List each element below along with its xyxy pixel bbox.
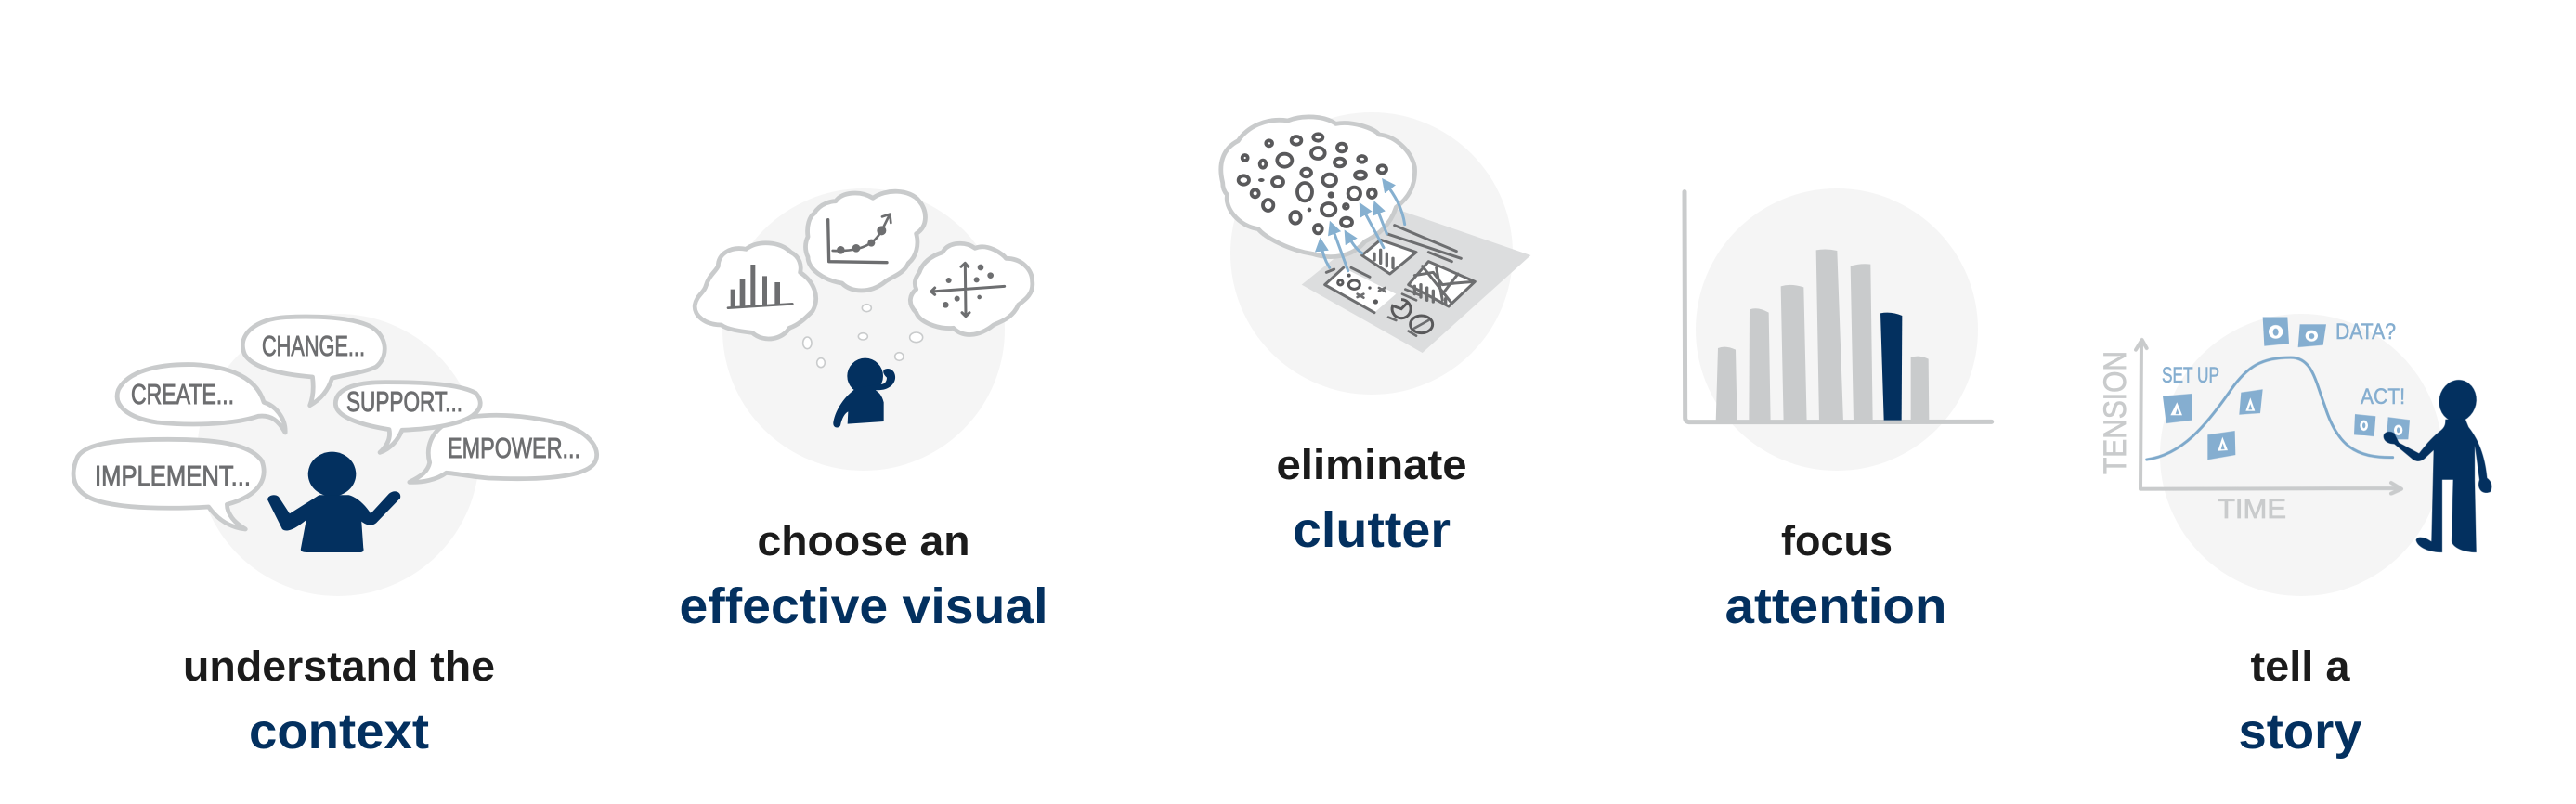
label: choose an effective visual [680, 517, 1047, 634]
label: focus attention: focus [1781, 517, 1893, 564]
panel: understand the context [73, 314, 597, 759]
label: focus attention [1725, 517, 1946, 634]
cloud: scatter plot [910, 243, 1033, 334]
cloud: bar chart [695, 243, 816, 339]
label: tell a story: story [2238, 704, 2362, 759]
background circle [1230, 112, 1513, 395]
gray bars [1716, 249, 1929, 424]
background circle [197, 314, 479, 596]
highlighted navy bar [1880, 313, 1902, 421]
illustration: clutter cloud above dashboard [1221, 117, 1530, 353]
label: eliminate clutter [1276, 441, 1467, 558]
arrows from dashboard to cloud [1321, 183, 1405, 271]
label: understand the context: context [249, 704, 429, 759]
speech bubbles [73, 317, 597, 529]
icon: presenting person [2384, 376, 2491, 552]
tension curve [2147, 357, 2393, 460]
text: set up: SET UP [2162, 363, 2219, 388]
label: understand the context [183, 642, 495, 759]
panel: eliminate clutter [1221, 112, 1530, 558]
axes [2136, 340, 2401, 494]
cluttered circles [1239, 134, 1386, 233]
bubble text: implement: IMPLEMENT... [95, 460, 251, 492]
panel: choose an effective visual [680, 188, 1047, 634]
label: eliminate clutter: clutter [1293, 502, 1451, 558]
label: eliminate clutter: eliminate [1276, 441, 1467, 488]
label: focus attention: attention [1725, 578, 1946, 634]
text: tension axis label: TENSION [2098, 351, 2133, 474]
background circle [2160, 314, 2442, 596]
icon: person shrugging [267, 452, 400, 552]
label: choose an effective visual: effective visual [680, 578, 1047, 634]
bubble text: change: CHANGE... [262, 330, 365, 362]
icon: thinking person [833, 358, 895, 428]
bubble text: support: SUPPORT... [346, 385, 462, 418]
panel: focus attention [1685, 188, 1992, 634]
filled dots [1258, 178, 1334, 212]
background circle [722, 188, 1005, 471]
text: act!: ACT! [2361, 384, 2405, 409]
panel: tell a story [2098, 314, 2491, 759]
bar chart [1685, 192, 1992, 424]
cloud: line chart [805, 191, 925, 291]
bubble text: empower: EMPOWER... [448, 432, 580, 464]
axes [1685, 192, 1992, 422]
label: tell a story: tell a [2251, 642, 2351, 690]
dashboard paper [1302, 209, 1530, 353]
label: understand the context: understand the [183, 642, 495, 690]
cloud [1221, 117, 1415, 257]
background circle [1696, 188, 1978, 471]
thought clouds and person [695, 191, 1033, 428]
label: choose an effective visual: choose an [758, 517, 969, 564]
bubble text: create: CREATE... [131, 378, 234, 410]
thought bubbles [803, 305, 923, 368]
text: data?: DATA? [2335, 319, 2396, 344]
label: tell a story [2238, 642, 2362, 759]
narrative arc chart [2136, 318, 2491, 552]
data squares [2163, 318, 2410, 460]
text: time axis label: TIME [2218, 494, 2286, 525]
